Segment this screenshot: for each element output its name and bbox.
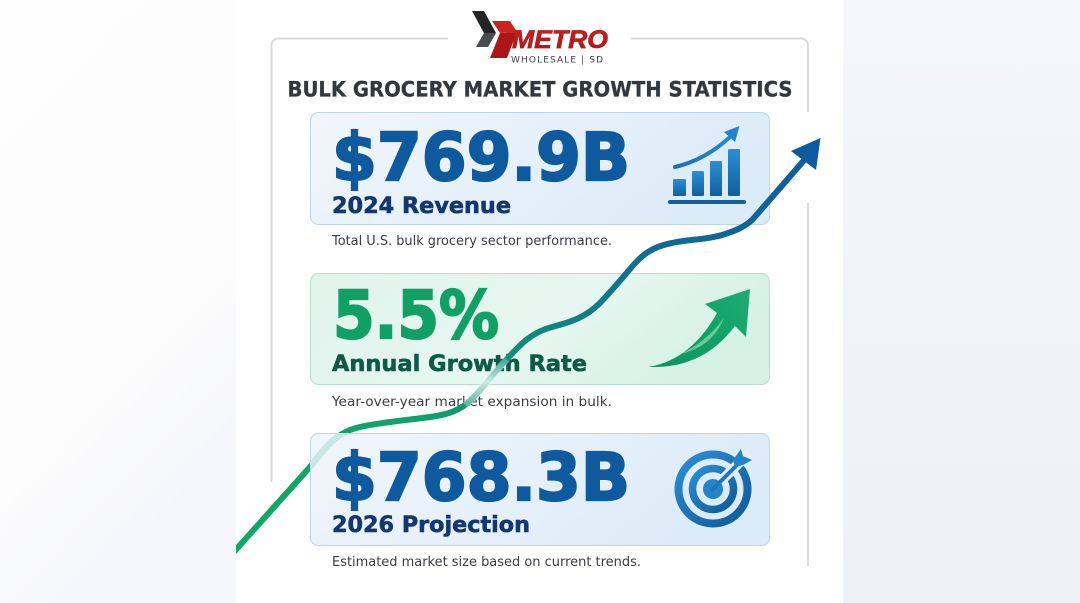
panel: annual growth rate — [310, 274, 770, 384]
label: Annual Growth Rate: Annual Growth Rate — [332, 352, 587, 377]
stat: $769.9B: $769.9B — [332, 119, 630, 196]
trend line arrow — [232, 138, 820, 554]
panel: 2024 revenue — [310, 112, 770, 224]
icon: target with dart — [678, 449, 752, 524]
stat: 5.5%: 5.5% — [333, 277, 499, 354]
outer frame — [272, 38, 808, 566]
icon: bar chart with rising arrow — [668, 126, 746, 204]
background: left side — [0, 0, 236, 603]
background: right side — [843, 0, 1080, 603]
label: 2024 Revenue: 2024 Revenue — [332, 194, 511, 219]
logo: Metro Wholesale SD: WHOLESALE | SD — [511, 56, 603, 66]
label: 2026 Projection: 2026 Projection — [332, 513, 530, 538]
stat: $768.3B: $768.3B — [332, 439, 630, 516]
caption: projection: Estimated market size based on current trends. — [332, 555, 641, 570]
logo: Metro Wholesale SD — [472, 11, 609, 66]
title: BULK GROCERY MARKET GROWTH STATISTICS — [288, 78, 792, 102]
icon: green rising arrow — [648, 289, 750, 367]
caption: growth: Year-over-year market expansion in bulk. — [331, 395, 612, 410]
background: centre sheet — [236, 0, 843, 603]
logo: Metro Wholesale SD: METRO — [512, 26, 609, 54]
caption: revenue: Total U.S. bulk grocery sector performance. — [331, 234, 612, 249]
panel: 2026 projection — [310, 434, 770, 546]
